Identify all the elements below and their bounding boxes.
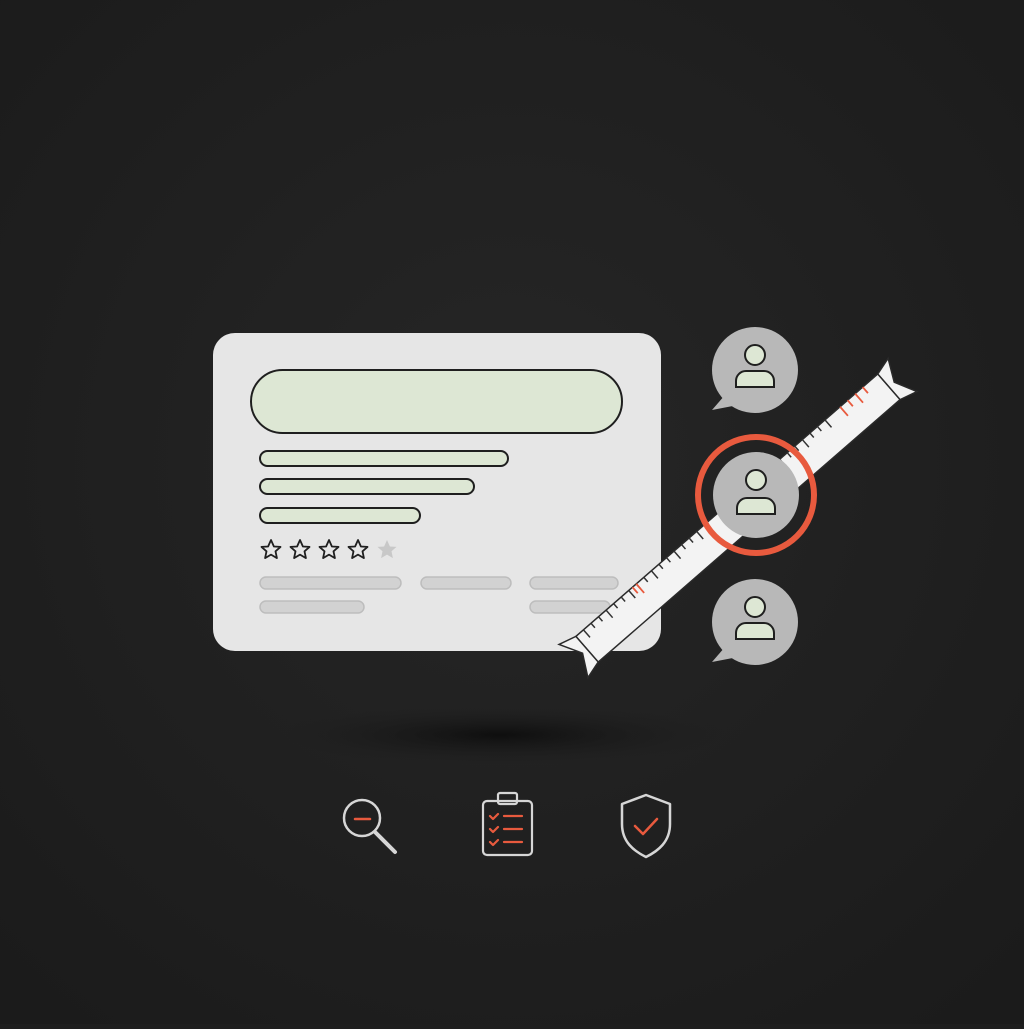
icon: clipboard (483, 793, 532, 855)
title pill (251, 370, 622, 433)
bubble: highlighted user (698, 437, 814, 553)
shadow under card (270, 705, 730, 765)
gray meta bars (260, 577, 618, 613)
icon: shield (622, 795, 670, 857)
icon: magnifier (344, 800, 395, 852)
tape measure (559, 358, 917, 678)
text lines (260, 451, 508, 523)
bubble: bottom user (712, 579, 798, 665)
panel: review card (213, 333, 661, 651)
bubble: top user (712, 327, 798, 413)
red highlight ring (698, 437, 814, 553)
star rating (262, 540, 396, 558)
